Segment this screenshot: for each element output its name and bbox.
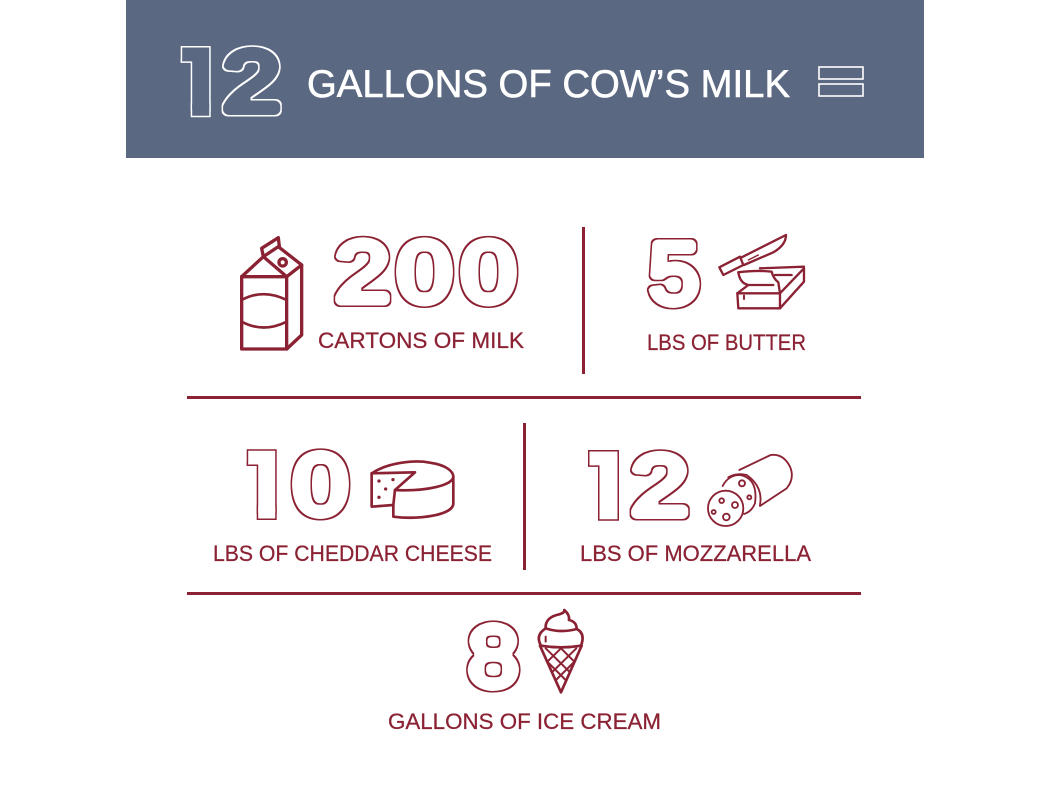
number 5: 5 (649, 225, 699, 322)
panel: ice cream (388, 608, 661, 734)
label: CARTONS OF MILK (318, 328, 524, 353)
panel: cheddar cheese (214, 448, 492, 562)
icon: equals bars (819, 67, 863, 96)
icon: ice cream cone (539, 610, 583, 692)
number 10: 0 (293, 436, 348, 533)
number 12: 2 (631, 438, 688, 534)
panel: mozzarella (582, 449, 812, 562)
divider lines (187, 227, 861, 595)
icon: butter and knife (719, 235, 804, 308)
header number 12: 2 (223, 34, 280, 130)
number 12 (588, 449, 690, 521)
panel: cartons of milk (242, 224, 524, 353)
header title: GALLONS OF COW’S MILK (307, 63, 790, 106)
number 8: 8 (468, 608, 519, 704)
header banner (126, 0, 924, 158)
label: LBS OF CHEDDAR CHEESE (213, 541, 492, 566)
number 10 (246, 448, 350, 520)
label: LBS OF MOZZARELLA (580, 541, 811, 566)
panel: butter (647, 225, 806, 355)
icon: milk carton (242, 238, 302, 349)
header number 12 (180, 45, 282, 118)
label: LBS OF BUTTER (647, 330, 806, 355)
number 10: 1 (235, 437, 293, 533)
icon: mozzarella log (708, 455, 792, 526)
header number 12: 1 (169, 34, 227, 130)
icon: cheese wheel (372, 462, 453, 518)
number 12: 1 (576, 438, 634, 534)
label: GALLONS OF ICE CREAM (388, 709, 661, 734)
number 200: 200 (335, 224, 516, 320)
